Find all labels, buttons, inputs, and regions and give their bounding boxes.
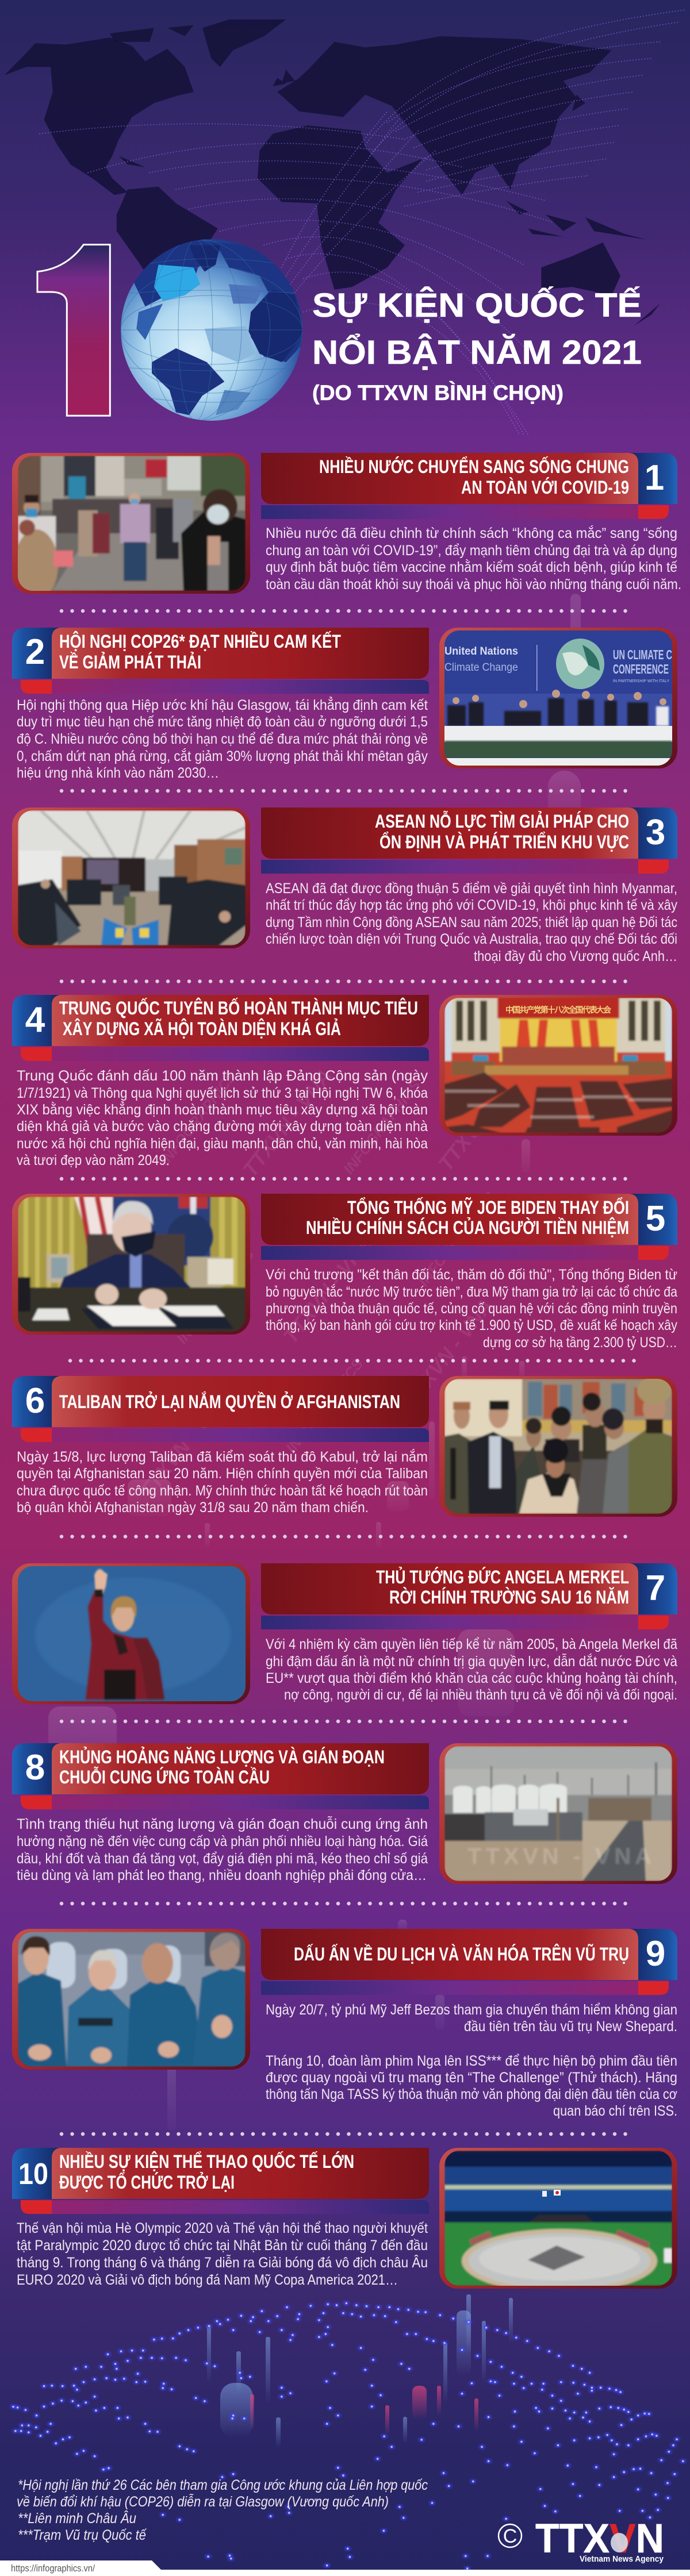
heading 3: [261, 808, 677, 874]
watermarks: TTXVN - VNA: [399, 1294, 497, 1411]
text block 8: hưởng nặng nề đến việc cung cấp và phân phối nhiều loại hàng hóa. Giá: [17, 1833, 428, 1850]
text block 10: EURO 2020 và Giải vô địch bóng đá Nam Mỹ Copa America 2021…: [17, 2272, 398, 2288]
source bar: [0, 2560, 690, 2576]
heading 2: 2: [25, 632, 45, 672]
text block 1: Nhiều nước đã điều chỉnh từ chính sách “không ca mắc” sang “sống: [266, 525, 677, 541]
photo: New Shepard crew: [12, 1929, 250, 2070]
text block 4: 1/7/1921) và Thông qua Nghị quyết lịch sử thứ 3 tại Hội nghị TW 6, khóa: [17, 1085, 428, 1101]
heading 7: [261, 1563, 677, 1629]
watermarks: TTXVN - VNA: [278, 1231, 377, 1348]
logo: TTXVN Vietnam News Agency: TTXVN: [535, 2516, 664, 2562]
text block 2: Hội nghị thông qua Hiệp ước khí hậu Glasgow, tái khẳng định cam kết: [17, 696, 428, 713]
watermarks: TTXVN - VNA: [135, 1386, 233, 1503]
photo: Taliban in palace: [439, 1376, 677, 1517]
footnotes: *Hội nghị lần thứ 26 Các bên tham gia Công ước khung của Liên hợp quốc: [18, 2477, 428, 2493]
footnotes: ***Trạm Vũ trụ Quốc tế: [18, 2527, 147, 2543]
source bar: https://infographics.vn/: [11, 2563, 95, 2574]
photo: COP26 stage: Climate Change: [444, 662, 518, 674]
heading 7: RỜI CHÍNH TRƯỜNG SAU 16 NĂM: [389, 1587, 629, 1608]
text block 8: [17, 1816, 428, 1883]
heading 2: [12, 628, 429, 694]
heading 9: 9: [646, 1934, 665, 1974]
photo: Angela Merkel waving: [12, 1563, 250, 1704]
panel: event 7: [12, 1563, 677, 1704]
text block 8: tiêu dùng và lạm phát leo thang, nhiều doanh nghiệp phải đóng cửa…: [17, 1867, 427, 1883]
text block 6: [17, 1448, 428, 1516]
text block 2: [17, 696, 428, 781]
world map silhouette: [5, 20, 660, 326]
panel: event 8: [12, 1743, 677, 1884]
heading 8: [12, 1743, 429, 1809]
panel: event 9: [12, 1929, 677, 2119]
text block 7: [266, 1636, 677, 1703]
text block 4: Trung Quốc đánh dấu 100 năm thành lập Đảng Cộng sản (ngày: [17, 1068, 428, 1084]
text block 9: [266, 2002, 677, 2119]
title: [312, 287, 642, 405]
photo: Olympic stadium ceremony: [439, 2148, 677, 2293]
panel: event 4: [12, 995, 677, 1168]
background pillars: [48, 594, 581, 2131]
watermarks: INFOGRAPHICS: [173, 1246, 258, 1347]
icon: globe as zero: [121, 239, 304, 421]
text block 2: 0, chấm dứt nạn phá rừng, cắt giảm 30% lượng phát thải khí mêtan gây: [17, 748, 428, 764]
photo: LNG plant: TTXVN - VNA: [467, 1844, 651, 1869]
heading 3: ASEAN NỖ LỰC TÌM GIẢI PHÁP CHO: [375, 811, 629, 832]
text block 4: XIX bằng việc khẳng định hoàn thành mục tiêu xây dựng xã hội toàn: [17, 1101, 428, 1118]
text block 4: nước xã hội chủ nghĩa hiện đại, giàu mạnh, dân chủ, văn minh, hài hòa: [17, 1136, 428, 1152]
photo: COP26 stage: [439, 628, 677, 768]
heading 4: [12, 995, 429, 1061]
watermarks: INFOGRAPHICS: [156, 1068, 240, 1169]
text block 8: dầu, khí đốt và than đá tăng vọt, đẩy giá điện phi mã, kéo theo chỉ số giá: [17, 1851, 428, 1867]
text block 4: và tươi đẹp vào năm 2049.: [17, 1152, 170, 1168]
watermarks: TTXVN - VNA: [238, 1064, 336, 1181]
heading 2: VỀ GIẢM PHÁT THẢI: [59, 652, 201, 672]
panel: event 3: [12, 808, 677, 964]
heading 1: [261, 453, 677, 519]
text block 8: Tình trạng thiếu hụt năng lượng và gián đoạn chuỗi cung ứng ảnh: [17, 1816, 428, 1832]
heading 10: NHIỀU SỰ KIỆN THỂ THAO QUỐC TẾ LỚN: [59, 2151, 354, 2172]
footnotes: về biến đổi khí hậu (COP26) diễn ra tại Glasgow (Vương quốc Anh): [17, 2493, 389, 2510]
photo: Joe Biden signing: [12, 1194, 250, 1335]
heading 10: ĐƯỢC TỔ CHỨC TRỞ LẠI: [59, 2172, 235, 2193]
text block 2: hiệu ứng nhà kính vào năm 2030…: [17, 765, 219, 781]
photo: street crowd: [12, 453, 250, 601]
text block 5: [266, 1267, 677, 1351]
panel: event 2: [12, 628, 677, 781]
heading 7: 7: [646, 1568, 665, 1608]
text block 1: [266, 525, 681, 593]
photo: COP26 stage: IN PARTNERSHIP WITH ITALY: [613, 679, 669, 683]
watermarks: [135, 1064, 499, 1503]
numeral one of big 10: [37, 245, 110, 416]
text block 3: [266, 881, 677, 964]
heading 1: AN TOÀN VỚI COVID-19: [461, 477, 629, 498]
heading 6: [12, 1376, 429, 1442]
photo: China party congress hall: [439, 995, 677, 1136]
heading 8: CHUỖI CUNG ỨNG TOÀN CẦU: [59, 1767, 270, 1787]
title: NỔI BẬT NĂM 2021: [312, 334, 642, 371]
heading 6: TALIBAN TRỞ LẠI NẮM QUYỀN Ở AFGHANISTAN: [59, 1391, 400, 1412]
text block 6: bộ quân khỏi Afghanistan ngày 31/8 sau 20 năm tham chiến.: [17, 1500, 369, 1516]
heading 3: 3: [646, 813, 665, 852]
heading 8: KHỦNG HOẢNG NĂNG LƯỢNG VÀ GIÁN ĐOẠN: [59, 1747, 385, 1767]
text block 6: Ngày 15/8, lực lượng Taliban đã kiểm soát thủ đô Kabul, trở lại nắm: [17, 1448, 428, 1465]
heading 5: [261, 1194, 677, 1260]
logo: TTXVN Vietnam News Agency: C: [503, 2525, 517, 2547]
watermarks: INFOGRAPHICS: [340, 1076, 424, 1178]
footnotes: **Liên minh Châu Âu: [18, 2510, 136, 2527]
watermarks: TTXVN: [434, 1107, 494, 1175]
photo: LNG plant: [439, 1743, 677, 1884]
text block 4: [17, 1068, 428, 1168]
panel: event 1: [12, 453, 681, 601]
heading 4: 4: [25, 1000, 45, 1040]
text block 2: độ C. Nhiều nước công bố thời hạn cụ thể để đưa mức phát thải ròng về: [17, 731, 428, 747]
heading 4: XÂY DỰNG XÃ HỘI TOÀN DIỆN KHÁ GIẢ: [63, 1018, 341, 1039]
heading 5: TỔNG THỐNG MỸ JOE BIDEN THAY ĐỔI: [347, 1197, 629, 1218]
footnotes: [17, 2477, 428, 2543]
title: (DO TTXVN BÌNH CHỌN): [312, 381, 564, 405]
heading 10: 10: [18, 2158, 48, 2191]
text block 2: duy trì mục tiêu hạn chế mức tăng nhiệt độ toàn cầu ở ngưỡng dưới 1,5: [17, 714, 428, 730]
watermarks: INFOGRAPHICS: [282, 1355, 367, 1456]
heading 3: ỔN ĐỊNH VÀ PHÁT TRIỂN KHU VỰC: [379, 832, 629, 852]
glowing blue dots: [13, 2303, 683, 2569]
dotted wave pattern: [40, 10, 687, 435]
text block 6: chưa được quốc tế công nhận. Mỹ chính thức hoàn tất kế hoạch rút toàn: [17, 1483, 428, 1499]
photo: COP26 stage: United Nations: [444, 645, 518, 658]
text block 6: quyền tại Afghanistan sau 20 năm. Hiện chính quyền mới của Taliban: [17, 1466, 428, 1482]
logo: TTXVN Vietnam News Agency: Vietnam News Agency: [580, 2554, 664, 2564]
title: SỰ KIỆN QUỐC TẾ: [312, 287, 642, 324]
text block 10: [17, 2220, 428, 2288]
text block 10: Thế vận hội mùa Hè Olympic 2020 và Thế vận hội thể thao người khuyết: [17, 2220, 428, 2236]
photo: China party congress hall: 中国共产党第十八次全国代表大会: [505, 1005, 612, 1014]
photo: ASEAN meeting room: [12, 808, 250, 948]
watermarks: INFOGRAPHICS: [415, 1189, 499, 1290]
text block 10: tật Paralympic 2020 được tổ chức tại Nhật Bản từ cuối tháng 7 đến đầu: [17, 2237, 428, 2254]
panel: event 5: [12, 1194, 677, 1351]
heading 6: 6: [25, 1381, 45, 1421]
heading 1: 1: [645, 458, 664, 498]
heading 10: [12, 2148, 429, 2214]
heading 5: 5: [646, 1199, 665, 1239]
heading 4: TRUNG QUỐC TUYÊN BỐ HOÀN THÀNH MỤC TIÊU: [59, 998, 418, 1018]
heading 2: HỘI NGHỊ COP26* ĐẠT NHIỀU CAM KẾT: [59, 631, 341, 652]
heading 9: [261, 1929, 677, 1995]
panel: event 6: [12, 1376, 677, 1517]
text block 4: diện khá giả và bước vào chặng đường mới xây dựng toàn diện nhà: [17, 1118, 428, 1135]
heading 8: 8: [25, 1748, 45, 1787]
panel: event 10: [12, 2148, 677, 2293]
text block 10: tháng 9. Trong tháng 6 và tháng 7 diễn ra Giải bóng đá vô địch châu Âu: [17, 2254, 428, 2271]
bottom light pillars: [207, 2294, 513, 2447]
